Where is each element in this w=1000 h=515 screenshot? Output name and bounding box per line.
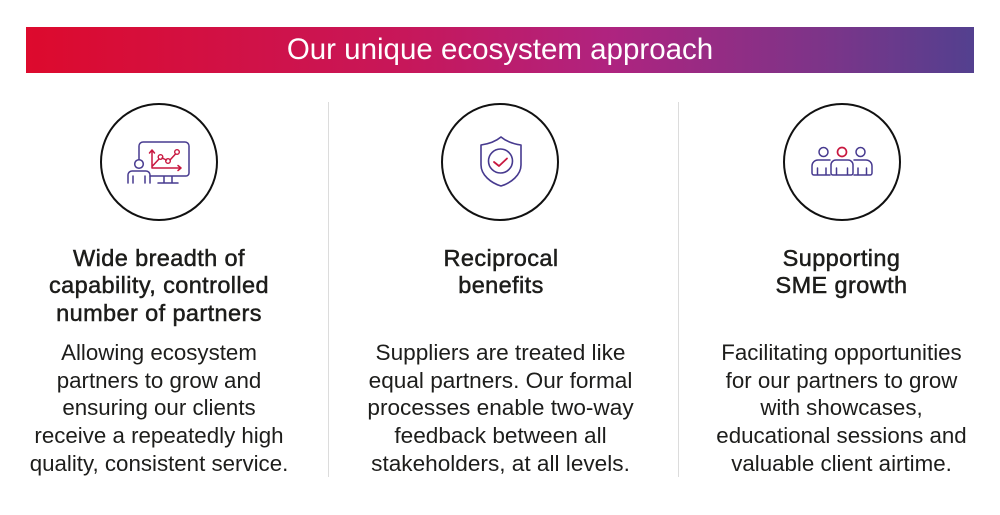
heading: wide breadth: number of partners — [56, 300, 262, 326]
heading: reciprocal benefits — [443, 244, 559, 298]
text: supporting SME growth description: with showcases, — [760, 395, 923, 420]
heading: reciprocal benefits: benefits — [458, 272, 544, 298]
text: supporting SME growth description: educational sessions and — [716, 423, 967, 448]
text: supporting SME growth description: for our partners to grow — [726, 368, 957, 393]
icon: presenter with chart — [100, 103, 218, 221]
text: reciprocal benefits description — [367, 340, 634, 476]
text: wide breadth description: receive a repeatedly high — [34, 423, 284, 448]
text: reciprocal benefits description: stakeholders, at all levels. — [371, 451, 630, 476]
text: wide breadth description: ensuring our clients — [62, 395, 256, 420]
text: supporting SME growth description: valuable client airtime. — [731, 451, 952, 476]
text: supporting SME growth description: Facilitating opportunities — [721, 340, 962, 365]
heading: supporting SME growth: Supporting — [783, 244, 900, 270]
title banner: Our unique ecosystem approach — [287, 33, 713, 66]
text: reciprocal benefits description: feedback between all — [394, 423, 607, 448]
heading: supporting SME growth — [776, 244, 908, 298]
heading: wide breadth — [49, 244, 269, 326]
text: wide breadth description: Allowing ecosystem — [61, 340, 257, 365]
icon: shield with check — [441, 103, 559, 221]
icon: three people — [783, 103, 901, 221]
text: reciprocal benefits description: Suppliers are treated like — [376, 340, 625, 365]
text: wide breadth description: partners to grow and — [57, 368, 261, 393]
heading: supporting SME growth: SME growth — [776, 272, 908, 298]
text: supporting SME growth description — [716, 340, 967, 476]
title banner — [26, 27, 974, 73]
heading: wide breadth: Wide breadth of — [73, 244, 245, 270]
heading: wide breadth: capability, controlled — [49, 272, 269, 298]
text: wide breadth description: quality, consistent service. — [30, 451, 288, 476]
text: wide breadth description — [30, 340, 288, 476]
heading: reciprocal benefits: Reciprocal — [443, 244, 559, 270]
text: reciprocal benefits description: processes enable two-way — [367, 395, 634, 420]
text: reciprocal benefits description: equal partners. Our formal — [369, 368, 632, 393]
